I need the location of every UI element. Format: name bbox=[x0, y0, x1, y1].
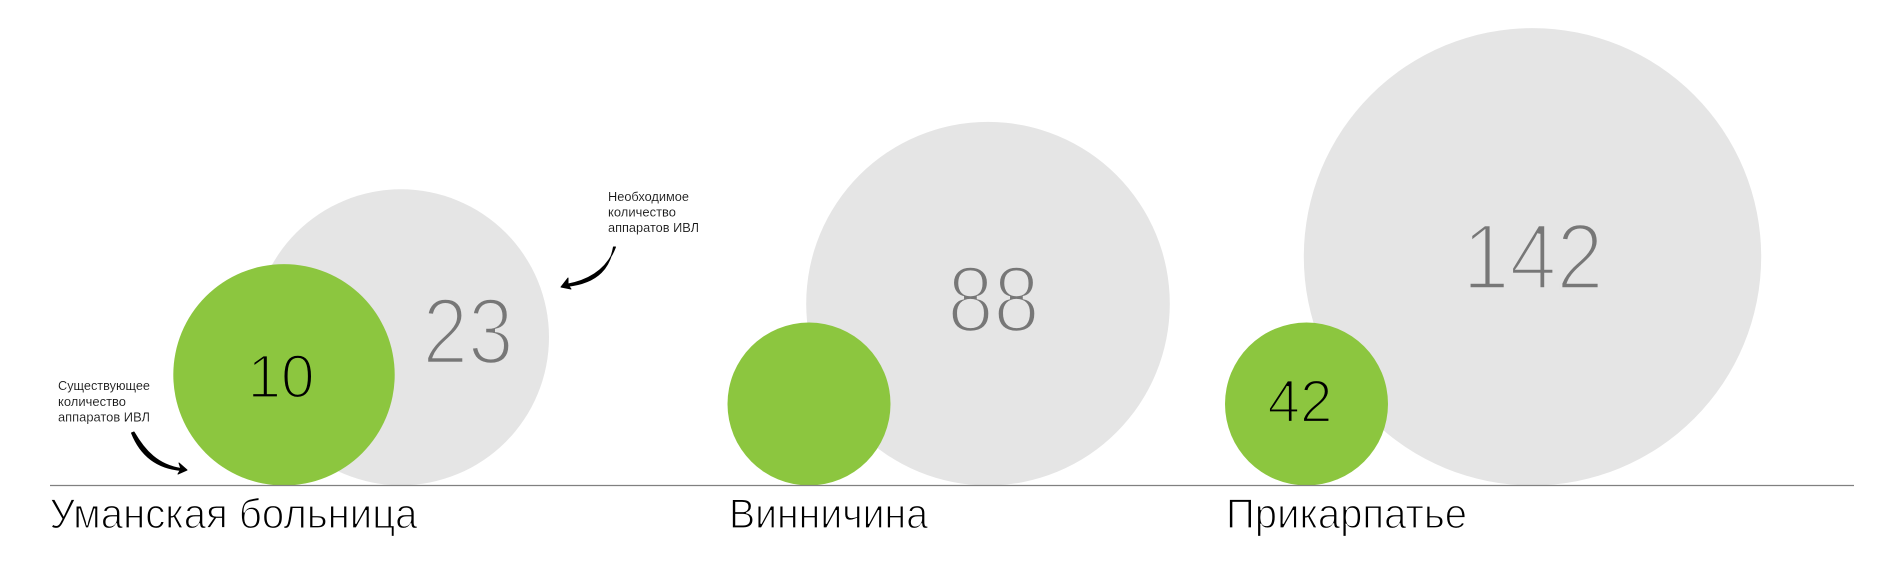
number: 88: 88 bbox=[948, 246, 1040, 352]
circle: existing 10 bbox=[173, 264, 395, 485]
circle: existing 42 bbox=[1225, 322, 1388, 486]
callout: existing quantity: Существующее bbox=[58, 379, 150, 393]
arrow: to needed circle bbox=[561, 247, 616, 289]
group: Винничина circles bbox=[728, 122, 1170, 485]
circle: needed 88 bbox=[806, 122, 1170, 485]
callout: needed quantity: количество bbox=[608, 206, 676, 220]
circle: existing bbox=[728, 322, 890, 486]
arrow: to existing circle bbox=[132, 432, 187, 474]
callout: needed quantity: Необходимое bbox=[608, 190, 689, 204]
callout: existing quantity bbox=[58, 379, 150, 425]
number: 23: 23 bbox=[422, 278, 514, 384]
circle: needed 23 bbox=[253, 189, 549, 485]
callout: existing quantity: аппаратов ИВЛ bbox=[58, 411, 150, 425]
label: Уманская больница: Уманская больница bbox=[50, 490, 418, 537]
number: 10: 10 bbox=[248, 343, 314, 411]
group: Уманская больница circles bbox=[173, 189, 549, 485]
callout: existing quantity: количество bbox=[58, 395, 126, 409]
number: 142: 142 bbox=[1462, 204, 1604, 309]
baseline rule bbox=[50, 484, 1854, 486]
group: Прикарпатье circles bbox=[1225, 28, 1761, 486]
number: 42: 42 bbox=[1268, 368, 1332, 435]
label: Прикарпатье: Прикарпатье bbox=[1226, 490, 1467, 537]
callout: needed quantity bbox=[608, 190, 699, 235]
label: Винничина: Винничина bbox=[729, 490, 929, 537]
callout: needed quantity: аппаратов ИВЛ bbox=[608, 221, 699, 235]
circle: needed 142 bbox=[1304, 28, 1761, 486]
